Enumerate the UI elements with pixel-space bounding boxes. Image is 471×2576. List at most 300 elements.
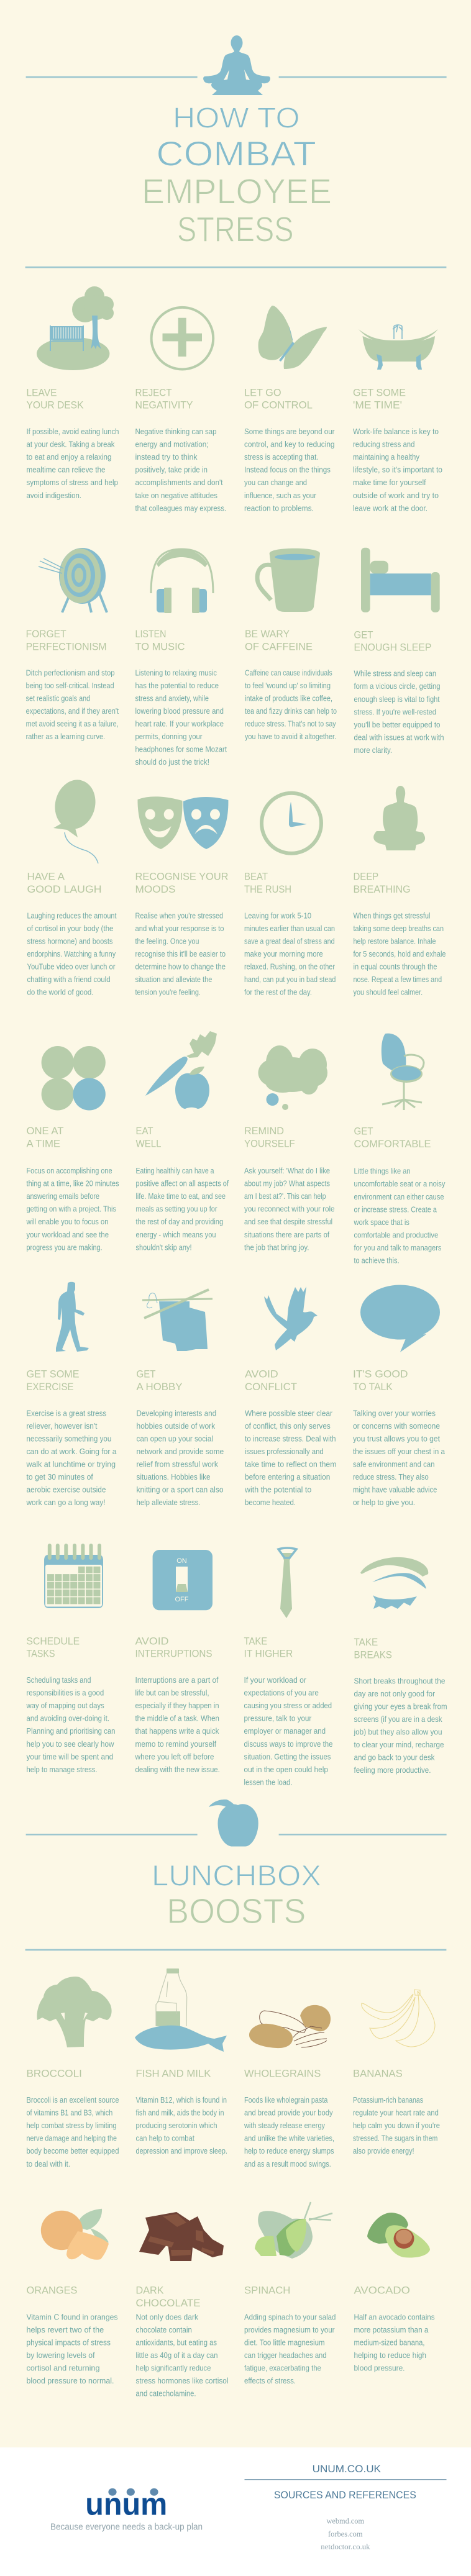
icon: calendar — [44, 1545, 103, 1608]
text: schedule tasks — [26, 1675, 116, 1774]
text: fish and milk: producing serotonin which — [135, 2121, 217, 2130]
panel: get some me time — [353, 325, 442, 512]
panel: get enough sleep — [354, 548, 444, 755]
text: fish and milk: can help to combat — [135, 2134, 194, 2143]
text: beat the rush: hand, can put you in bad stead — [244, 975, 336, 984]
text: leave your desk: symptoms of stress and help — [26, 478, 118, 487]
text: schedule tasks: Scheduling tasks and — [26, 1675, 91, 1685]
heading: take it higher: IT HIGHER — [244, 1649, 293, 1660]
heading: reject negativity: NEGATIVITY — [135, 400, 193, 411]
text: reject negativity: positively, take pride in — [135, 465, 208, 475]
panel: avoid conflict — [244, 1286, 336, 1507]
text: one at a time: getting on with a project. This — [26, 1204, 116, 1214]
heading: get some exercise: GET SOME — [26, 1369, 80, 1380]
source list: webmd.com — [327, 2516, 364, 2526]
text: reject negativity: Negative thinking can sap — [135, 427, 216, 436]
text: get some exercise: aerobic exercise outside — [26, 1485, 106, 1495]
icon: apple — [209, 1800, 258, 1846]
icon: avocado — [367, 2213, 430, 2257]
text: forget perfectionism: set realistic goals and — [26, 693, 90, 703]
text: get some me time: lifestyle, so it's important to — [353, 465, 442, 475]
heading: forget perfectionism: PERFECTIONISM — [26, 641, 107, 652]
text: get enough sleep: enough sleep is vital to fight — [354, 694, 440, 704]
heading: get comfortable — [354, 1126, 431, 1150]
text: it's good to talk: Talking over your worries — [353, 1408, 436, 1418]
text: recognise your moods: recognise this it'll be easier to — [135, 949, 226, 958]
text: get comfortable: comfortable and productive — [354, 1230, 438, 1239]
text: dark chocolate: stress hormones like cortisol — [135, 2376, 229, 2385]
heading: leave your desk: LEAVE — [26, 387, 57, 398]
heading: be wary of caffeine: OF CAFFEINE — [245, 641, 313, 652]
text: leave your desk: If possible, avoid eating lunch — [26, 427, 119, 436]
heading: get enough sleep — [354, 629, 431, 653]
icon: speech bubble — [360, 1285, 440, 1352]
text: take it higher: expectations of you are — [244, 1688, 319, 1698]
text: schedule tasks: way of mapping out days — [26, 1701, 104, 1710]
heading: it's good to talk — [353, 1369, 408, 1393]
icon: dove — [264, 1286, 318, 1350]
text: beat the rush: save a great deal of stress and — [244, 936, 334, 945]
icon: chocolate pieces — [139, 2212, 224, 2261]
text: listen to music: headphones for some Mozart — [135, 745, 227, 754]
heading: recognise your moods: MOODS — [135, 884, 176, 895]
heading: avoid conflict: CONFLICT — [245, 1381, 297, 1393]
text: avoid conflict: with the potential to — [244, 1485, 311, 1495]
text: recognise your moods: and what your response is to — [135, 924, 224, 933]
text: get enough sleep: more clarity. — [354, 745, 392, 755]
heading: have a good laugh: HAVE A — [27, 872, 65, 883]
text: schedule tasks: responsibilities is a good — [26, 1688, 104, 1698]
text: eat well: shouldn't skip any! — [135, 1242, 191, 1252]
text: broccoli: nerve damage and helping the — [26, 2134, 117, 2143]
panel: remind yourself — [244, 1045, 334, 1252]
text: get some me time: Work-life balance is key to — [353, 427, 439, 436]
title: how to combat employee stress: STRESS — [177, 209, 293, 249]
text: get enough sleep: you'll be better equipped to — [354, 720, 440, 729]
text: deep breathing: in equal counts through the — [353, 962, 437, 972]
icon: clock — [262, 793, 321, 853]
text: have a good laugh: endorphins. Watching a funny — [27, 949, 116, 958]
text: oranges — [26, 2312, 118, 2385]
panel: get comfortable — [354, 1034, 446, 1265]
text: take it higher: pressure, talk to your — [244, 1714, 312, 1723]
text: it's good to talk: safe environment and can — [353, 1460, 435, 1469]
panel: get some exercise — [26, 1282, 117, 1507]
heading: deep breathing: DEEP — [353, 872, 378, 883]
text: reject negativity: take on negative attitudes — [135, 491, 217, 500]
text: take breaks: screens (if you are in a desk — [354, 1714, 442, 1724]
heading: bananas: BANANAS — [353, 2068, 403, 2079]
heading: remind yourself: YOURSELF — [244, 1138, 295, 1149]
text: avoid conflict: of conflict, this only serves — [245, 1421, 331, 1431]
icon: closed eye — [360, 1557, 428, 1609]
logo dots — [108, 2488, 158, 2496]
icon: spinach leaves — [255, 2202, 332, 2259]
text: oranges: by lowering levels of — [26, 2351, 95, 2360]
text: get some me time: reducing stress and — [353, 440, 415, 449]
text: have a good laugh: YouTube video over lunch or — [27, 962, 116, 972]
panel: get a hobby — [137, 1290, 224, 1507]
heading: eat well — [135, 1126, 162, 1149]
text: bananas — [353, 2095, 440, 2155]
text: bananas: Potassium-rich bananas — [353, 2095, 423, 2105]
text: broccoli: of vitamins B1 and B3, which — [26, 2108, 112, 2118]
text: forget perfectionism: rather as a learning curve. — [26, 732, 105, 741]
heading: have a good laugh: GOOD LAUGH — [27, 884, 101, 895]
text: get a hobby: knitting or a sport can also — [137, 1485, 224, 1495]
heading: eat well: WELL — [135, 1138, 162, 1149]
icon: bananas — [362, 1990, 435, 2047]
text: eat well: meals as setting you up for — [135, 1204, 217, 1214]
text: avoid interruptions: dealing with the new issue. — [135, 1765, 220, 1774]
text: deep breathing: nose. Repeat a few times and — [353, 975, 442, 984]
icon: meditating figure — [203, 35, 270, 95]
icon: necktie — [278, 1548, 296, 1618]
heading: it's good to talk: TO TALK — [353, 1381, 393, 1393]
text: one at a time — [26, 1166, 119, 1252]
icon: seated person — [373, 786, 425, 850]
title: lunchbox boosts: LUNCHBOX — [152, 1860, 321, 1893]
text: forget perfectionism: Ditch perfectionism and stop — [26, 668, 115, 677]
icon: broccoli — [37, 1977, 112, 2047]
icon: balloon — [50, 775, 101, 863]
icon: light switch — [153, 1550, 213, 1610]
text: dark chocolate: antioxidants, but eating as — [135, 2337, 217, 2347]
text: wholegrains: and bread provide your body — [244, 2108, 333, 2118]
text: remind yourself: am I best at?'. This can help — [244, 1191, 326, 1201]
text: avoid conflict: become heated. — [245, 1498, 296, 1507]
icon: coffee mug — [257, 548, 320, 612]
sources heading: SOURCES AND REFERENCES — [274, 2490, 416, 2501]
text: eat well: energy - which means you — [135, 1230, 216, 1239]
panel: avoid interruptions — [135, 1550, 220, 1774]
heading: deep breathing — [353, 872, 410, 895]
text: one at a time: will enable you to focus on — [26, 1217, 109, 1226]
text: spinach — [244, 2312, 336, 2385]
text: fish and milk: fish and milk, aids the body in — [135, 2108, 224, 2118]
text: have a good laugh: chatting with a friend could — [27, 975, 111, 984]
text: be wary of caffeine: tea and fizzy drinks can help to — [245, 706, 337, 716]
text: avocado: Half an avocado contains — [354, 2312, 435, 2321]
text: avoid conflict: before entering a situation — [245, 1472, 330, 1481]
text: dark chocolate — [135, 2312, 229, 2398]
source list: forbes.com — [328, 2529, 363, 2538]
panel: wholegrains — [244, 2005, 334, 2169]
text: leave your desk — [26, 427, 119, 500]
heading: avoid conflict: AVOID — [245, 1369, 278, 1380]
text: avocado — [354, 2312, 435, 2373]
panel: listen to music — [135, 549, 227, 767]
text: get a hobby: can open up your social — [137, 1434, 213, 1443]
heading: fish and milk: FISH AND MILK — [135, 2068, 211, 2079]
heading: wholegrains: WHOLEGRAINS — [244, 2068, 321, 2079]
heading: dark chocolate — [135, 2285, 201, 2309]
text: bananas: help calm you down if you're — [353, 2121, 440, 2130]
text: broccoli: help combat stress by limiting — [26, 2121, 117, 2130]
text: recognise your moods: tension you're feeling. — [135, 988, 201, 997]
panel: beat the rush — [244, 793, 336, 997]
text: avocado: more potassium than a — [354, 2325, 429, 2334]
text: one at a time: Focus on accomplishing one — [26, 1166, 112, 1175]
text: let go of control: control, and key to reducing — [244, 440, 334, 449]
text: get some exercise: Exercise is a great stress — [26, 1408, 106, 1418]
heading: deep breathing: BREATHING — [353, 884, 410, 895]
text: let go of control: stress is accepting that. — [244, 452, 318, 462]
text: get a hobby: situations. Hobbies like — [137, 1472, 210, 1481]
title: how to combat employee stress: HOW TO — [173, 102, 300, 134]
text: get some me time: leave work at the door. — [353, 503, 428, 512]
text: it's good to talk: or help to give you. — [353, 1498, 415, 1507]
text: get comfortable: or increase stress. Create a — [354, 1204, 437, 1214]
icon: bread and grains — [249, 2005, 331, 2048]
text: schedule tasks: and avoiding over-doing it. — [26, 1714, 109, 1723]
text: schedule tasks: Planning and prioritising can — [26, 1726, 116, 1736]
text: take breaks: and go back to your desk — [354, 1753, 435, 1762]
text: get a hobby — [137, 1408, 224, 1507]
text: be wary of caffeine — [245, 668, 337, 741]
heading: it's good to talk: IT'S GOOD — [353, 1369, 408, 1380]
text: get some exercise: work can go a long way! — [26, 1498, 106, 1507]
heading: schedule tasks — [26, 1636, 80, 1660]
text: get some exercise: reliever, however isn't — [26, 1421, 98, 1431]
title: how to combat employee stress — [142, 102, 332, 249]
text: eat well: Eating healthily can have a — [135, 1166, 214, 1175]
text: spinach: effects of stress. — [244, 2376, 296, 2385]
text: get enough sleep: stress. If you're well-rested — [354, 707, 436, 716]
text: take breaks: giving your eyes a break from — [354, 1701, 447, 1711]
text: spinach: diet. Too little magnesium — [244, 2337, 325, 2347]
text: recognise your moods: determine how to change the — [135, 962, 226, 972]
title: how to combat employee stress: COMBAT — [156, 134, 316, 173]
text: take breaks: Short breaks throughout the — [354, 1676, 445, 1685]
text: it's good to talk: might have valuable advice — [353, 1485, 437, 1495]
text: it's good to talk: the issues off your chest in a — [353, 1447, 446, 1456]
title: lunchbox boosts: BOOSTS — [167, 1891, 306, 1931]
text: eat well: the rest of day and providing — [135, 1217, 223, 1226]
heading: beat the rush: THE RUSH — [244, 884, 291, 895]
text: it's good to talk — [353, 1408, 446, 1507]
heading: recognise your moods: RECOGNISE YOUR — [135, 872, 229, 883]
panel: let go of control — [244, 306, 335, 512]
text: remind yourself — [244, 1166, 334, 1252]
website link: UNUM.CO.UK — [313, 2464, 381, 2475]
text: avocado: helping to reduce high — [354, 2351, 426, 2360]
panel: recognise your moods — [135, 796, 229, 997]
logo wordmark: unum — [85, 2486, 167, 2521]
text: fish and milk: depression and improve sleep. — [135, 2146, 227, 2155]
text: let go of control: you can change and — [244, 478, 307, 487]
tagline: Because everyone needs a back-up plan — [50, 2522, 203, 2532]
heading: avoid conflict — [245, 1369, 297, 1393]
icon: orange and segments — [41, 2209, 109, 2260]
text: be wary of caffeine: Caffeine can cause individuals — [245, 668, 332, 677]
heading: avoid interruptions: INTERRUPTIONS — [135, 1649, 213, 1660]
text: take it higher: situation. Getting the issues — [244, 1752, 331, 1761]
text: listen to music: should do just the trick! — [135, 757, 209, 767]
text: eat well: life. Make time to eat, and see — [135, 1191, 226, 1201]
heading: broccoli: BROCCOLI — [26, 2068, 82, 2079]
text: get some exercise: can do at work. Going for a — [26, 1447, 117, 1456]
text: let go of control: reaction to problems. — [244, 503, 314, 512]
text: take it higher: out in the open could help — [244, 1765, 328, 1774]
text: have a good laugh: Laughing reduces the amount — [27, 911, 117, 920]
text: wholegrains: and as a result mood swings. — [244, 2159, 331, 2169]
text: avoid interruptions: the middle of a task. When — [135, 1714, 219, 1723]
panel: take breaks — [354, 1557, 447, 1775]
icon: carrot and apple — [145, 1031, 217, 1109]
text: be wary of caffeine: to feel 'wound up' so limiting — [245, 681, 331, 690]
icon: butterfly — [258, 306, 327, 369]
text: have a good laugh: stress hormone) and boosts — [27, 936, 113, 945]
text: reject negativity: instead try to think — [135, 452, 198, 462]
text: avoid interruptions: especially if they happen in — [135, 1701, 219, 1710]
text: one at a time: thing at a time, like 20 minutes — [26, 1179, 119, 1188]
heading: one at a time: A TIME — [26, 1138, 60, 1149]
heading: get a hobby: GET — [137, 1369, 156, 1380]
heading: oranges: ORANGES — [26, 2285, 78, 2296]
text: deep breathing — [353, 911, 446, 997]
text: get a hobby: relief from stressful work — [137, 1460, 219, 1469]
panel: schedule tasks — [26, 1545, 116, 1774]
title: how to combat employee stress: EMPLOYEE — [142, 172, 332, 212]
panel: fish and milk — [135, 1968, 227, 2155]
text: it's good to talk: or concerns with someone — [353, 1421, 440, 1431]
icon: light switch: OFF — [175, 1596, 189, 1603]
text: get some me time — [353, 427, 442, 512]
text: leave your desk: avoid indigestion. — [26, 491, 81, 500]
text: oranges: physical impacts of stress — [26, 2337, 111, 2347]
text: get some me time: outside of work and try to — [353, 491, 439, 500]
text: fish and milk — [135, 2095, 227, 2155]
heading: listen to music: LISTEN — [135, 629, 167, 640]
text: one at a time: progress you are making. — [26, 1242, 103, 1252]
text: broccoli: body become better equipped — [26, 2146, 119, 2155]
icon: four circles — [42, 1046, 106, 1111]
text: let go of control: Some things are beyond our — [244, 427, 335, 436]
heading: avoid interruptions — [135, 1636, 213, 1660]
text: remind yourself: you reconnect with your role — [244, 1204, 334, 1214]
text: wholegrains: help to reduce energy slumps — [244, 2146, 334, 2155]
heading: let go of control: LET GO — [244, 387, 281, 398]
text: get a hobby: Developing interests and — [137, 1408, 216, 1418]
text: get some me time: make time for yourself — [353, 478, 426, 487]
heading: eat well: EAT — [135, 1126, 153, 1137]
text: oranges: cortisol and returning — [26, 2364, 99, 2373]
text: have a good laugh — [27, 911, 117, 997]
heading: avoid interruptions: AVOID — [135, 1636, 169, 1647]
panel: leave your desk — [26, 286, 119, 500]
heading: get some me time: 'ME TIME' — [353, 400, 402, 411]
text: one at a time: your workload and see the — [26, 1230, 109, 1239]
section header: lunchbox boosts — [25, 1800, 447, 1950]
text: listen to music: Listening to relaxing music — [135, 668, 217, 677]
text: avocado: medium-sized banana, — [354, 2337, 425, 2347]
text: one at a time: answering emails before — [26, 1191, 99, 1201]
text: reject negativity — [135, 427, 226, 512]
text: let go of control: influence, such as your — [244, 491, 317, 500]
text: spinach: fatigue, exacerbating the — [244, 2364, 321, 2373]
text: get a hobby: hobbies outside of work — [137, 1421, 216, 1431]
text: broccoli — [26, 2095, 119, 2169]
text: take breaks — [354, 1676, 447, 1775]
text: dark chocolate: Not only does dark — [135, 2312, 199, 2321]
heading: avocado: AVOCADO — [354, 2285, 410, 2296]
heading: get some exercise: EXERCISE — [26, 1381, 74, 1393]
panel: broccoli — [26, 1977, 119, 2169]
text: dark chocolate: chocolate contain — [135, 2325, 192, 2334]
heading: schedule tasks: SCHEDULE — [26, 1636, 80, 1647]
text: let go of control: Instead focus on the things — [244, 465, 331, 475]
text: avoid conflict: to increase stress. Deal with — [245, 1434, 336, 1443]
heading: let go of control: OF CONTROL — [244, 400, 313, 411]
heading: take breaks: TAKE — [354, 1637, 378, 1648]
text: avocado: blood pressure. — [354, 2364, 405, 2373]
text: deep breathing: taking some deep breaths can — [353, 924, 444, 933]
heading: one at a time: ONE AT — [26, 1126, 64, 1137]
text: take it higher: If your workload or — [244, 1675, 307, 1685]
panel: one at a time — [26, 1046, 119, 1252]
text: it's good to talk: you trust allows you to get — [353, 1434, 440, 1443]
heading: one at a time — [26, 1126, 64, 1149]
text: have a good laugh: of cortisol in your body (the — [27, 924, 113, 933]
heading: beat the rush — [244, 872, 291, 895]
text: wholegrains: and unlike the white varieties, — [244, 2134, 334, 2143]
text: get comfortable: work space that is — [354, 1217, 409, 1227]
panel: oranges — [26, 2209, 118, 2385]
text: avoid interruptions: Interruptions are a part of — [135, 1675, 219, 1685]
text: get comfortable: uncomfortable seat or a noisy — [354, 1179, 446, 1188]
text: listen to music — [135, 668, 227, 767]
text: take it higher: employer or manager and — [244, 1726, 326, 1736]
text: take breaks: to clear your mind, recharge — [354, 1740, 444, 1749]
heading: leave your desk: YOUR DESK — [26, 400, 84, 411]
heading: get enough sleep: ENOUGH SLEEP — [354, 642, 431, 653]
text: schedule tasks: your time will be spent and — [26, 1752, 113, 1761]
text: have a good laugh: do the world of good. — [27, 988, 93, 997]
text: avoid interruptions: life but can be stressful, — [135, 1688, 209, 1698]
panel: bananas — [353, 1990, 440, 2155]
icon: plus in circle — [152, 307, 213, 369]
text: oranges: Vitamin C found in oranges — [26, 2312, 118, 2321]
text: get some exercise: walk at lunchtime or trying — [26, 1460, 116, 1469]
text: let go of control — [244, 427, 335, 512]
heading: dark chocolate: CHOCOLATE — [135, 2298, 201, 2309]
text: recognise your moods: Realise when you're stressed — [135, 911, 223, 920]
panel: avocado — [354, 2213, 435, 2373]
text: schedule tasks: help to manage stress. — [26, 1765, 97, 1774]
heading: listen to music — [135, 629, 185, 652]
heading: be wary of caffeine — [245, 629, 313, 652]
text: bananas: also provide energy! — [353, 2146, 414, 2155]
text: remind yourself: about my job? What aspects — [244, 1179, 330, 1188]
heading: listen to music: TO MUSIC — [135, 641, 185, 652]
title: lunchbox boosts — [152, 1860, 321, 1931]
text: beat the rush: minutes earlier than usual can — [244, 924, 335, 933]
text: get a hobby: help alleviate stress. — [137, 1498, 200, 1507]
text: beat the rush: relaxed. Rushing, on the other — [244, 962, 336, 972]
text: get comfortable: to achieve this. — [354, 1256, 399, 1265]
text: oranges: helps revert two of the — [26, 2325, 104, 2334]
text: dark chocolate: little as 40g of it a day can — [135, 2351, 217, 2360]
text: listen to music: stress and anxiety, while — [135, 693, 209, 703]
text: avoid interruptions: that happens write a quick — [135, 1726, 219, 1736]
heading: take it higher — [244, 1636, 293, 1660]
text: be wary of caffeine: you have to avoid it altogether. — [245, 732, 336, 741]
text: eat well — [135, 1166, 229, 1252]
panel: deep breathing — [353, 786, 446, 997]
text: recognise your moods: situation and alleviate the — [135, 975, 212, 984]
text: reject negativity: that colleagues may express. — [135, 503, 226, 512]
